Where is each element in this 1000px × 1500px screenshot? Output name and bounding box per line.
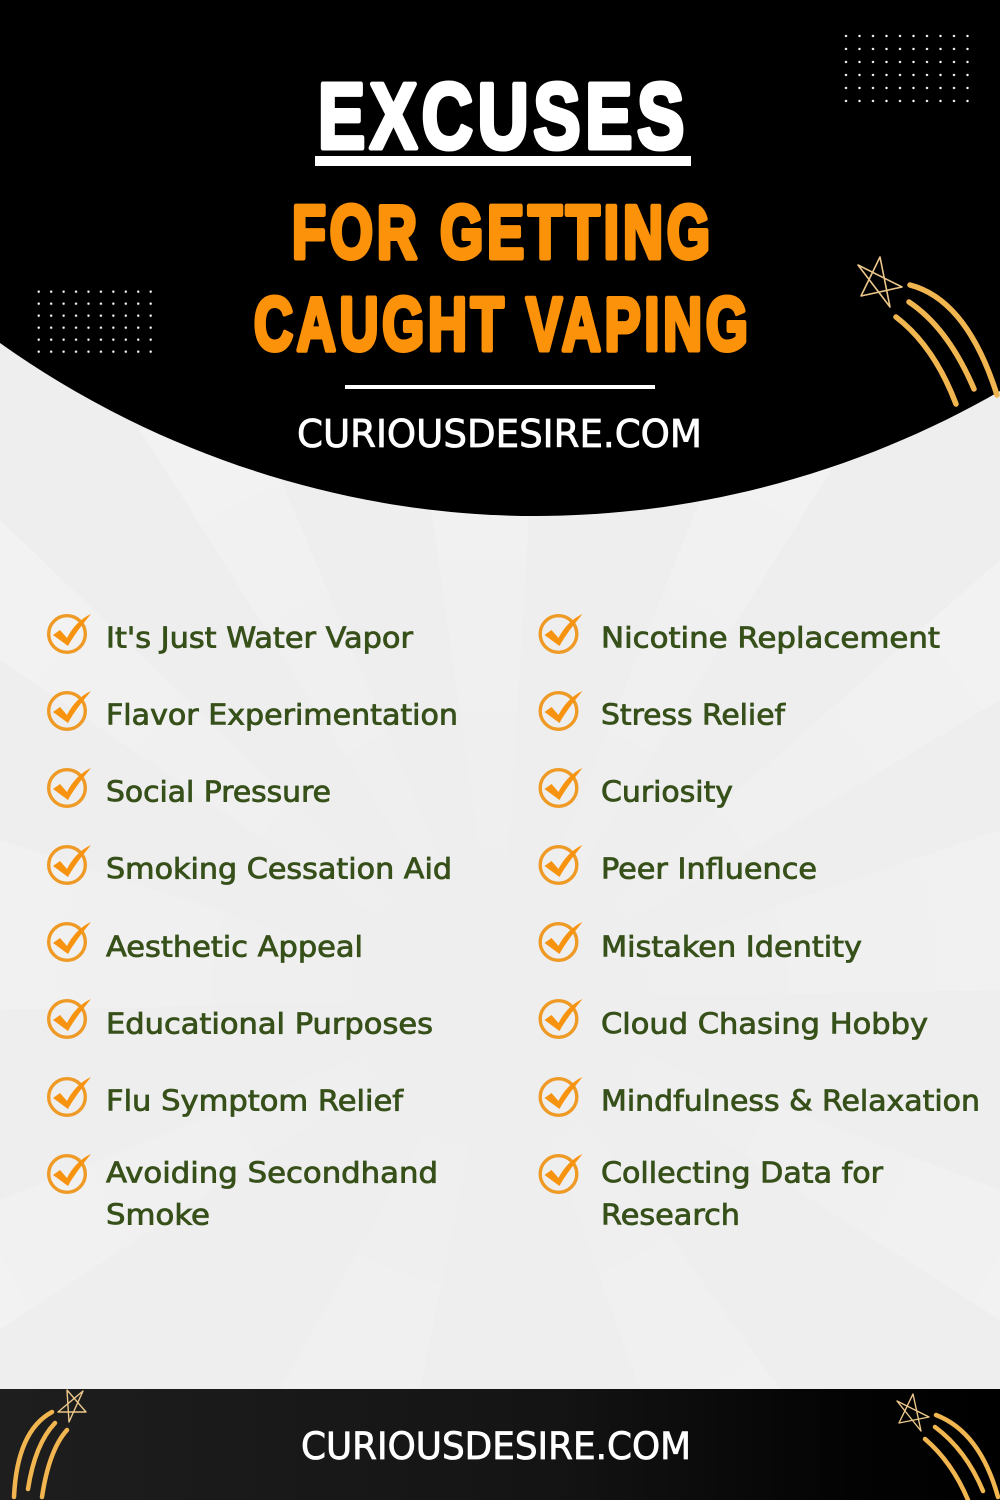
item: Cloud Chasing Hobby: Cloud Chasing Hobby <box>601 1008 928 1040</box>
item: Flavor Experimentation: Flavor Experimentation <box>106 698 458 732</box>
header website: CURIOUSDESIRE.COM <box>297 412 702 456</box>
dot grid top right <box>839 30 974 108</box>
item: Curiosity <box>540 768 733 808</box>
footer website: CURIOUSDESIRE.COM <box>301 1425 691 1468</box>
item: Aesthetic Appeal: Aesthetic Appeal <box>106 930 363 964</box>
item: Peer Influence: Peer Influence <box>601 852 817 886</box>
list: left column <box>49 614 458 1232</box>
item: Avoiding Secondhand Smoke: Smoke <box>106 1198 210 1232</box>
shooting star top right <box>858 257 997 404</box>
item: Educational Purposes: Educational Purposes <box>106 1008 433 1040</box>
list: right column <box>540 614 980 1232</box>
title: caught vaping: CAUGHT VAPING <box>254 282 748 366</box>
item: Nicotine Replacement: Nicotine Replacement <box>601 622 940 654</box>
item: Flu Symptom Relief <box>49 1077 404 1118</box>
item: Mindfulness & Relaxation: Mindfulness & Relaxation <box>601 1084 980 1118</box>
item: Avoiding Secondhand Smoke: Avoiding Secondhand <box>106 1156 438 1190</box>
item: Mistaken Identity: Mistaken Identity <box>601 930 862 964</box>
item: Social Pressure <box>49 768 331 808</box>
item: Flavor Experimentation <box>49 691 458 732</box>
header black curved panel <box>0 0 1000 516</box>
shooting star footer left <box>14 1390 86 1497</box>
item: Curiosity: Curiosity <box>601 776 733 808</box>
title: for getting: FOR GETTING <box>292 190 710 274</box>
title: EXCUSES: EXCUSES <box>318 64 684 168</box>
item: Peer Influence <box>540 845 817 886</box>
item: Social Pressure: Social Pressure <box>106 776 331 808</box>
item: Aesthetic Appeal <box>49 922 363 964</box>
item: Nicotine Replacement <box>540 614 940 654</box>
item: Educational Purposes <box>49 999 433 1040</box>
item: Collecting Data for Research: Research <box>601 1198 740 1232</box>
footer bar <box>0 1389 1000 1500</box>
item: Collecting Data for Research: Collecting Data for <box>601 1156 883 1190</box>
item: Stress Relief: Stress Relief <box>601 698 786 732</box>
item: Stress Relief <box>540 691 786 732</box>
title underline <box>315 156 691 166</box>
item: Avoiding Secondhand Smoke <box>49 1154 438 1232</box>
item: Flu Symptom Relief: Flu Symptom Relief <box>106 1084 404 1118</box>
header divider <box>345 385 655 389</box>
item: Mindfulness & Relaxation <box>540 1077 980 1118</box>
item: It's Just Water Vapor <box>49 614 413 654</box>
item: Collecting Data for Research <box>540 1154 883 1232</box>
item: Smoking Cessation Aid <box>49 845 452 886</box>
item: It's Just Water Vapor: It's Just Water Vapor <box>106 622 413 654</box>
item: Smoking Cessation Aid: Smoking Cessation Aid <box>106 852 452 886</box>
item: Cloud Chasing Hobby <box>540 999 928 1040</box>
shooting star footer right <box>897 1394 998 1500</box>
item: Mistaken Identity <box>540 922 862 964</box>
dot grid left <box>32 286 157 358</box>
